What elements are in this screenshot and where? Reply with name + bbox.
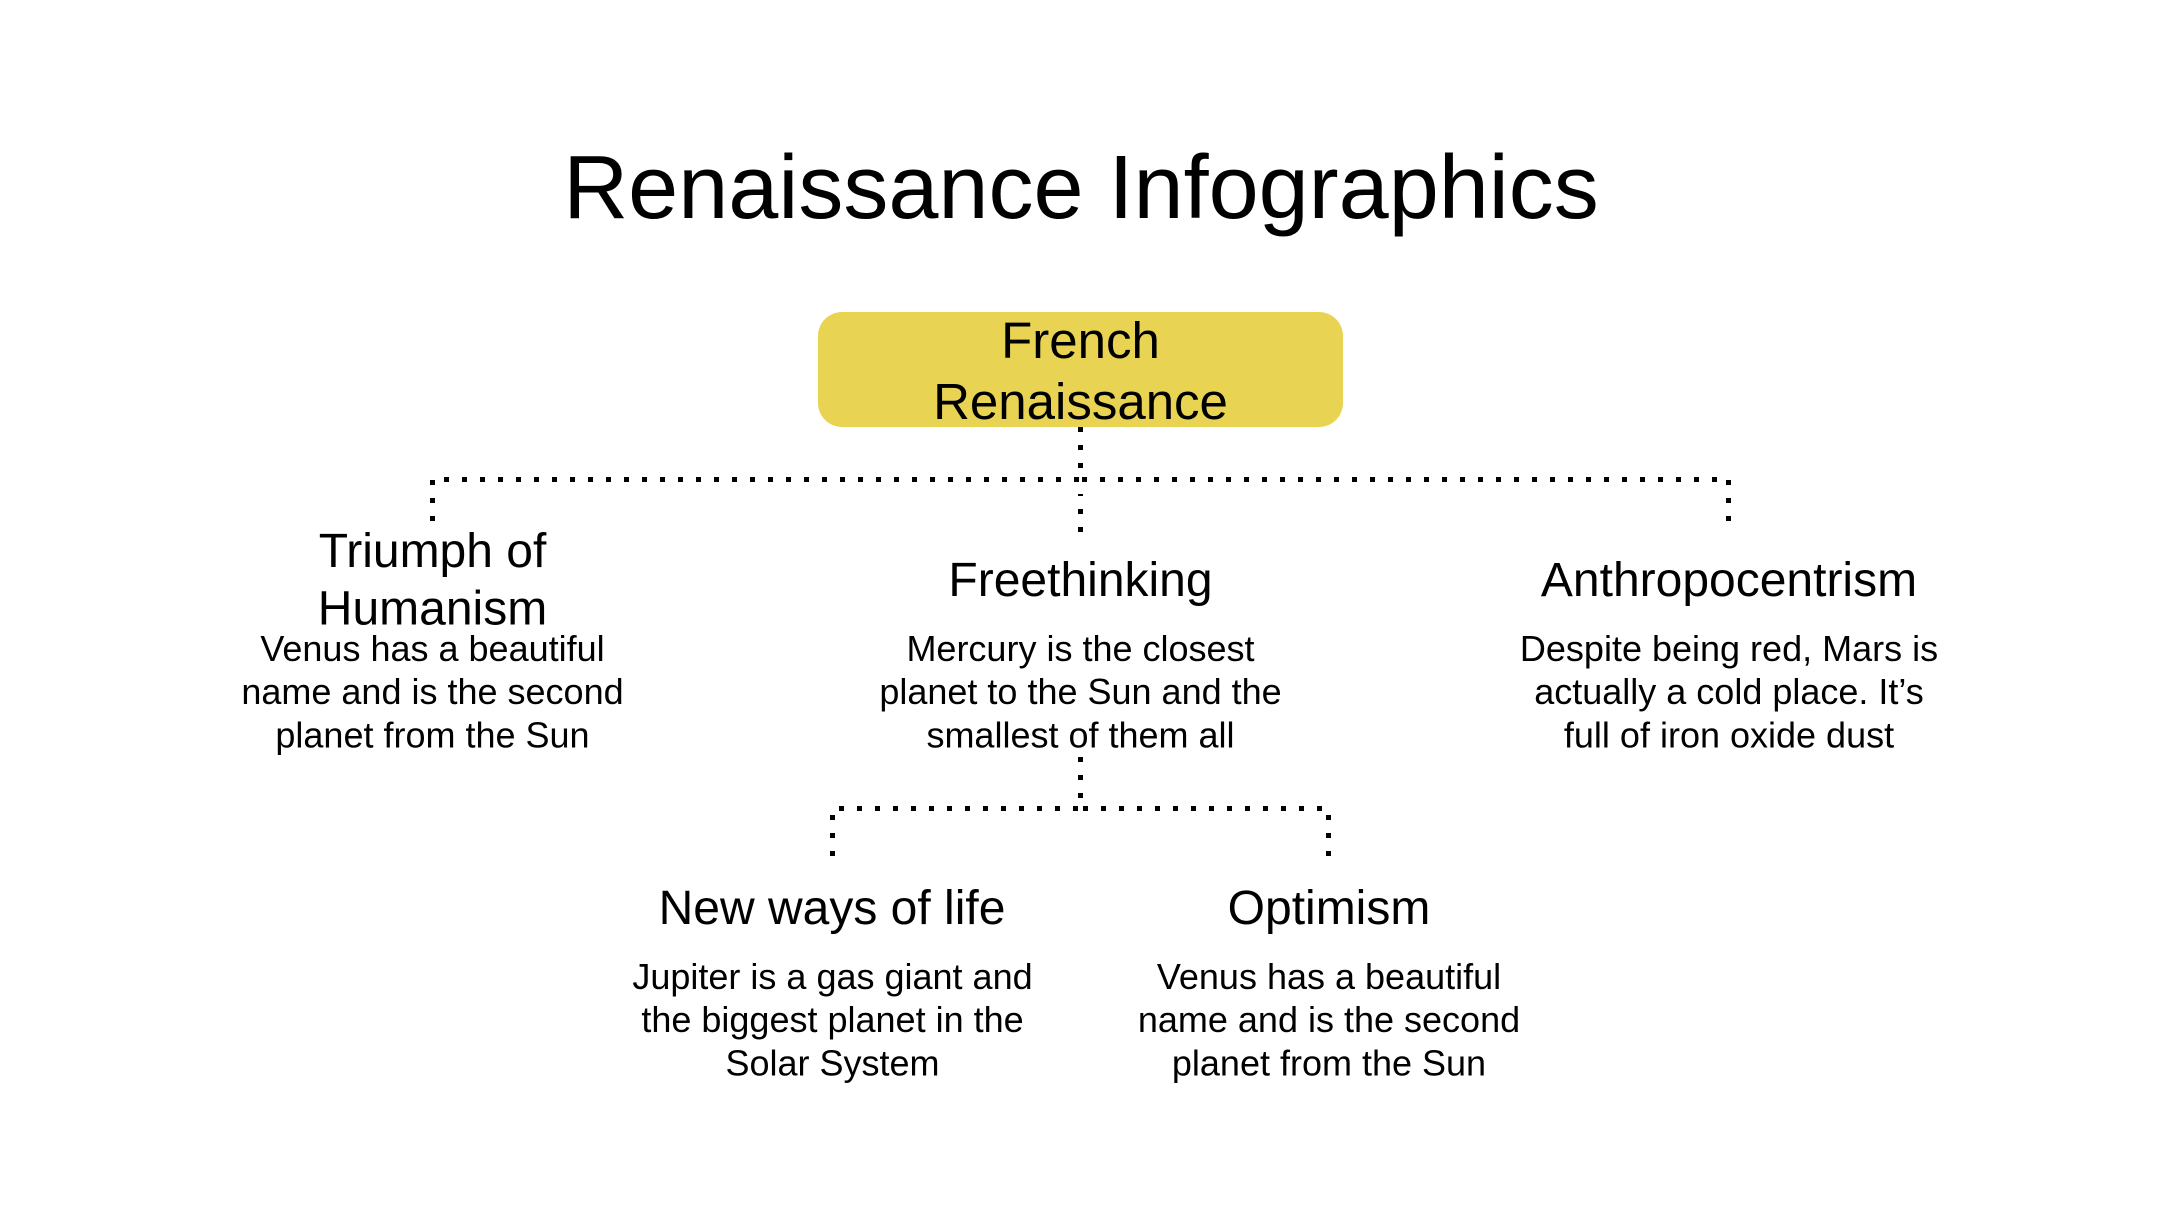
branch: Anthropocentrism: full of iron oxide dust (1564, 714, 1894, 756)
branch: Anthropocentrism: actually a cold place. It’s (1534, 671, 1924, 712)
branch: Freethinking: planet to the Sun and the (879, 671, 1282, 712)
branch: Triumph of Humanism: planet from the Sun (275, 714, 590, 756)
branch: Optimism: planet from the Sun (1172, 1042, 1486, 1084)
central node: French Renaissance: Renaissance (933, 373, 1228, 430)
branch: Anthropocentrism: Despite being red, Mars is (1520, 628, 1938, 669)
branch: Triumph of Humanism: Triumph of (319, 525, 547, 578)
branch: Optimism (1138, 882, 1520, 1084)
branch: Optimism: name and is the second (1138, 999, 1520, 1040)
branch: Freethinking: Mercury is the closest (906, 628, 1255, 669)
branch: Freethinking (879, 554, 1282, 756)
branch: Triumph of Humanism (241, 525, 624, 756)
branch: Anthropocentrism: Anthropocentrism (1541, 554, 1917, 607)
branch: New ways of life: the biggest planet in the (641, 999, 1024, 1040)
branch: Optimism: Optimism (1228, 882, 1430, 935)
branch: Anthropocentrism (1520, 554, 1938, 756)
branch: New ways of life: Jupiter is a gas giant and (632, 956, 1033, 997)
central node: French Renaissance: French (1001, 312, 1160, 369)
branch: Optimism: Venus has a beautiful (1157, 956, 1501, 997)
branch: Triumph of Humanism: Venus has a beautiful (260, 628, 605, 669)
branch: Triumph of Humanism: Humanism (318, 582, 547, 636)
branch: Freethinking: Freethinking (948, 554, 1213, 607)
branch: New ways of life (632, 882, 1033, 1084)
central node: French Renaissance (818, 312, 1343, 430)
branch: New ways of life: New ways of life (659, 882, 1005, 935)
branch: Freethinking: smallest of them all (926, 714, 1235, 756)
connector: lower tree (832, 757, 1328, 858)
title: Renaissance Infographics (563, 138, 1599, 238)
connector: top tree (432, 427, 1728, 533)
branch: New ways of life: Solar System (725, 1042, 940, 1084)
branch: Triumph of Humanism: name and is the second (241, 671, 624, 712)
